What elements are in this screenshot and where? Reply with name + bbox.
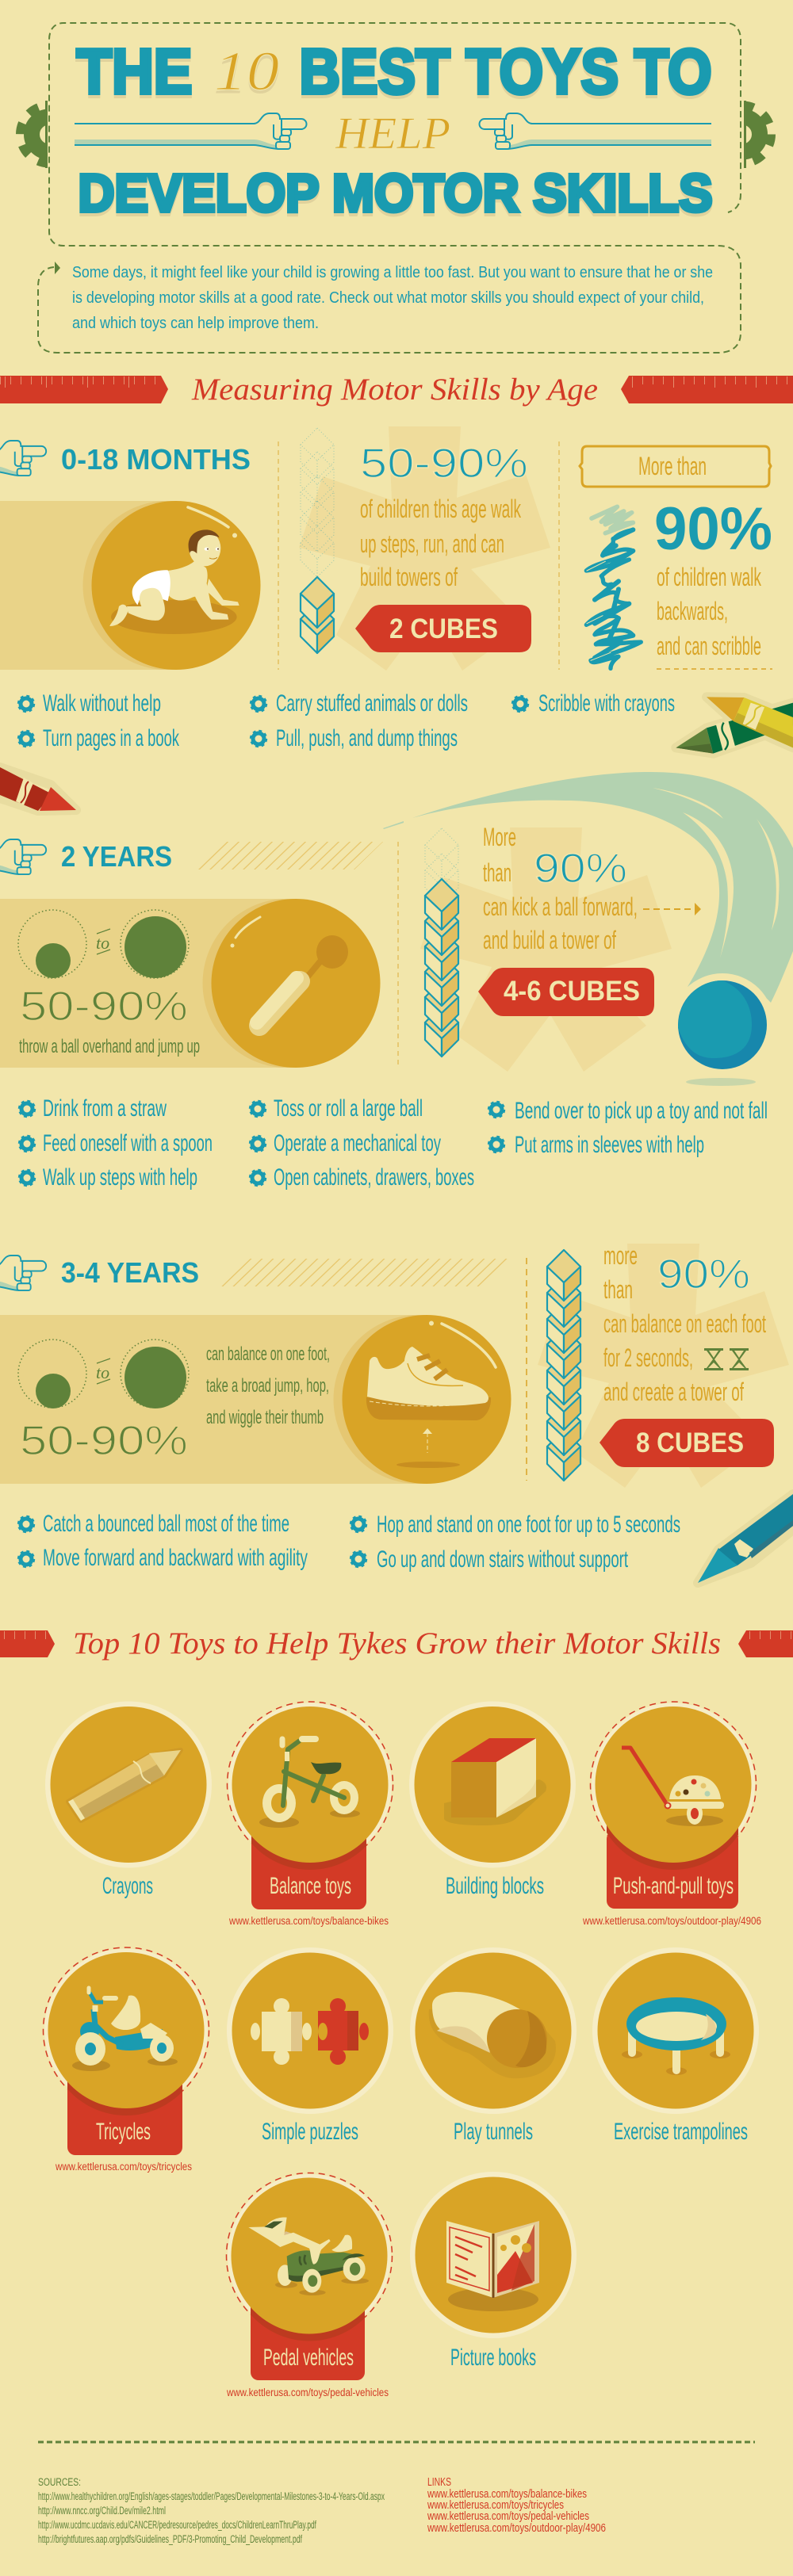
label: Crayons — [102, 1873, 153, 1899]
skill list: Carry stuffed animals or dolls — [276, 690, 468, 717]
cube tower: 8 cubes — [547, 1250, 580, 1481]
toy: exercise trampolines — [592, 1947, 759, 2145]
ball size comparison — [18, 1340, 189, 1408]
skill list — [19, 1095, 768, 1191]
skill list: Operate a mechanical toy — [274, 1130, 441, 1156]
toy: picture books — [410, 2172, 577, 2371]
intro text: Some days, it might feel like your child is growing a little too fast. But you want to ensure that he or she — [72, 264, 713, 281]
skill list: Pull, push, and dump things — [276, 725, 458, 751]
intro text — [72, 264, 713, 332]
skill list: Toss or roll a large ball — [274, 1095, 423, 1122]
divider — [278, 441, 559, 670]
arrow — [643, 903, 701, 915]
section: 0-18 months — [0, 426, 793, 754]
cube tower: 2 cubes — [301, 428, 334, 653]
banner: Measuring Motor Skills by Age — [0, 373, 793, 407]
text: more than 90%: 90% — [657, 1252, 750, 1298]
label: Tricycles — [96, 2119, 151, 2145]
text: more than 90%: More — [483, 823, 516, 851]
text: throw a ball: throw a ball overhand and jump up — [19, 1036, 200, 1057]
cube tower: 4-6 cubes — [425, 828, 458, 1057]
illustration: push toy — [622, 1748, 724, 1826]
hatch — [218, 1259, 511, 1286]
icon: hand — [0, 441, 46, 476]
stat: 50-90% green: 50-90% — [20, 1418, 188, 1464]
illustration: shoe in tube — [0, 1315, 511, 1484]
stat: 50-90%: 50-90% — [360, 441, 528, 487]
illustration: spoon in tube — [0, 899, 381, 1068]
illustration: green and yellow crayons — [676, 697, 793, 754]
icon: hourglasses — [704, 1348, 749, 1370]
toy: building blocks — [409, 1701, 576, 1899]
divider — [526, 1258, 527, 1481]
label: Building blocks — [446, 1873, 544, 1899]
background star — [538, 1244, 789, 1488]
skill list: Feed oneself with a spoon — [43, 1130, 213, 1156]
text: walk backwards: backwards, — [657, 597, 728, 625]
url: www.kettlerusa.com/toys/balance-bikes — [228, 1915, 389, 1927]
text: more than 90%: 90% — [534, 846, 627, 892]
label: Play tunnels — [454, 2119, 533, 2145]
ball size comparison: to — [96, 933, 109, 953]
heading: 2 years: 2 YEARS — [61, 840, 172, 873]
ball size comparison: to — [96, 1363, 109, 1382]
underline — [657, 668, 772, 670]
title line 3: DEVELOP MOTOR SKILLS — [78, 163, 712, 224]
tag: 4-6 cubes — [478, 968, 654, 1016]
text: more than 90%: than — [603, 1275, 633, 1304]
sources: http://brightfutures.aap.org/pdfs/Guidelines_PDF/3-Promoting_Child_Development.pdf — [38, 2533, 302, 2545]
illustration: blue crayon — [698, 1494, 793, 1583]
illustration: ball — [671, 973, 774, 1086]
url: www.kettlerusa.com/toys/outdoor-play/4906 — [582, 1915, 761, 1927]
divider — [397, 842, 399, 1066]
section: 3-4 years — [0, 1241, 793, 1583]
title line 1: THE — [76, 36, 192, 106]
heading: 3-4 years: 3-4 YEARS — [61, 1256, 199, 1289]
skill list: Walk without help — [43, 690, 161, 717]
icon: hand — [0, 839, 46, 874]
illustration: balance bike — [259, 1739, 360, 1828]
section: 2 years — [0, 823, 774, 1191]
illustration: book — [446, 2221, 539, 2311]
illustration: puzzle — [251, 1998, 369, 2065]
intro text: and which toys can help improve them. — [72, 315, 319, 332]
skill list: Walk up steps with help — [43, 1164, 197, 1191]
gear: left — [16, 101, 48, 168]
toy: tricycles — [43, 1947, 209, 2173]
text: more than 90%: and build a tower of — [483, 926, 616, 954]
banner: Measuring Motor Skills by Age: Measuring Motor Skills by Age — [191, 373, 598, 407]
text: balance on one foot: take a broad jump, hop, — [206, 1375, 329, 1397]
sources: SOURCES: — [38, 2476, 81, 2488]
links: www.kettlerusa.com/toys/balance-bikes — [427, 2488, 587, 2501]
gear: right — [744, 101, 776, 168]
tag: 2 cubes: 2 CUBES — [389, 613, 498, 644]
links — [427, 2476, 606, 2535]
banner: Top 10 Toys: Top 10 Toys to Help Tykes Grow their Motor Skills — [73, 1626, 721, 1661]
tag: 8 cubes: 8 CUBES — [636, 1428, 744, 1458]
tag: 2 cubes — [355, 605, 531, 652]
illustration: trampoline — [622, 1997, 730, 2075]
toy: play tunnels — [410, 1947, 577, 2145]
background star — [299, 426, 550, 671]
text: balance on one foot: and wiggle their thumb — [206, 1407, 324, 1428]
title — [76, 36, 712, 224]
background star — [420, 827, 672, 1072]
sources — [38, 2476, 385, 2545]
skill list: Go up and down stairs without support — [377, 1546, 628, 1573]
toy: balance toys — [227, 1702, 393, 1927]
heading: 0-18 months: 0-18 MONTHS — [61, 443, 251, 476]
text: more than 90%: than — [483, 858, 511, 887]
text: children walk up steps: build towers of — [360, 563, 458, 591]
sources: http://www.ucdmc.ucdavis.edu/CANCER/pedresource/pedres_docs/ChildrenLearnThruPlay.pdf — [38, 2519, 316, 2531]
skill list: Drink from a straw — [43, 1095, 167, 1122]
links: www.kettlerusa.com/toys/outdoor-play/4906 — [427, 2522, 606, 2535]
links: www.kettlerusa.com/toys/pedal-vehicles — [427, 2510, 589, 2523]
illustration: red crayon — [0, 767, 76, 811]
text: children walk up steps: up steps, run, and can — [360, 529, 504, 558]
text: more than 90%: for 2 seconds, — [603, 1343, 693, 1372]
icon: hand — [0, 1256, 46, 1290]
text: more than 90%: more — [603, 1241, 638, 1270]
text: more than 90% — [483, 823, 638, 954]
box: more than: More than — [638, 452, 707, 480]
dashed frame around title and intro — [38, 23, 741, 353]
illustration: pedal tractor — [248, 2217, 369, 2295]
illustration: tunnel — [429, 1992, 556, 2078]
scribble — [586, 506, 641, 668]
intro text: is developing motor skills at a good rate. Check out what motor skills you should expect of your child, — [72, 289, 704, 307]
skill list: Catch a bounced ball most of the time — [43, 1511, 289, 1537]
icon: right pointing hand with arm — [479, 113, 711, 149]
title line 1: 10 — [214, 41, 279, 102]
label: Picture books — [450, 2345, 536, 2371]
toy: crayons — [45, 1701, 212, 1899]
box: more than — [580, 446, 771, 487]
ball size comparison — [18, 910, 189, 978]
skill list: Open cabinets, drawers, boxes — [274, 1164, 474, 1191]
tag: 8 cubes — [600, 1419, 774, 1467]
text: more than 90%: can kick a ball forward, — [483, 892, 638, 921]
sources: http://www.healthychildren.org/English/ages-stages/toddler/Pages/Developmental-Milestones-3-to-4-Years-Old.aspx — [38, 2490, 385, 2502]
toy: pedal vehicles — [226, 2173, 392, 2398]
url: www.kettlerusa.com/toys/pedal-vehicles — [226, 2387, 389, 2398]
text: walk backwards — [657, 563, 762, 660]
toy: simple puzzles — [227, 1947, 393, 2145]
hatch — [196, 842, 383, 869]
toy: push-and-pull toys — [582, 1702, 761, 1927]
stat: 50-90% green: 50-90% — [20, 984, 188, 1030]
icon: frame arrowhead — [55, 262, 60, 274]
skill list: Turn pages in a book — [43, 725, 180, 751]
links: LINKS — [427, 2476, 451, 2489]
stat: 90%: 90% — [654, 495, 772, 563]
text: balance on one foot: can balance on one foot, — [206, 1343, 330, 1365]
sources: http://www.nncc.org/Child.Dev/mile2.html — [38, 2505, 166, 2517]
illustration: baby in tube — [0, 501, 260, 670]
illustration: tricycle — [72, 1988, 178, 2071]
swoosh behind ball — [383, 772, 793, 1003]
title word: HELP: HELP — [335, 109, 450, 159]
label: Pedal vehicles — [263, 2345, 354, 2371]
text: balance on one foot — [206, 1343, 330, 1428]
icon: left pointing hand with arm — [75, 113, 306, 149]
skill list — [18, 690, 675, 751]
skill list — [18, 1511, 680, 1573]
text: more than 90% — [603, 1241, 766, 1406]
label: Balance toys — [270, 1873, 351, 1899]
title line 1 — [76, 36, 712, 106]
title line 1: BEST TOYS TO — [300, 36, 712, 106]
skill list: Scribble with crayons — [538, 690, 675, 717]
text: children walk up steps: of children this age walk — [360, 495, 522, 523]
url: www.kettlerusa.com/toys/tricycles — [55, 2161, 192, 2173]
links: www.kettlerusa.com/toys/tricycles — [427, 2499, 564, 2512]
label: Simple puzzles — [262, 2119, 358, 2145]
text: children walk up steps — [360, 495, 522, 591]
tag: 4-6 cubes: 4-6 CUBES — [504, 976, 640, 1007]
skill list: Move forward and backward with agility — [43, 1545, 308, 1571]
